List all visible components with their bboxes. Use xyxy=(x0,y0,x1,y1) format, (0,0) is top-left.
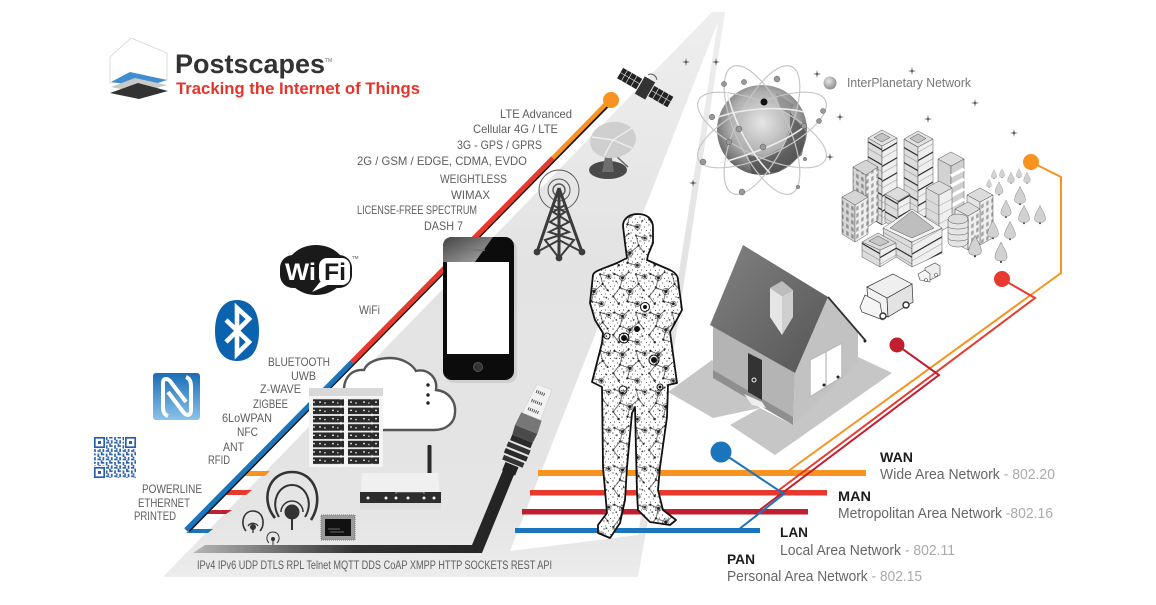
stars xyxy=(682,58,1018,187)
front block xyxy=(862,233,896,267)
cellular and long-range labels: 2G / GSM / EDGE, CDMA, EVDO xyxy=(357,154,527,168)
icon: person with network nodes xyxy=(590,214,682,538)
short-range labels xyxy=(134,355,330,523)
short-range labels: 6LoWPAN xyxy=(222,411,272,425)
icon: globe with orbits xyxy=(688,56,836,204)
icon: smartphone xyxy=(443,237,517,383)
bands: network horizontal lines xyxy=(515,470,866,533)
block G xyxy=(926,181,952,232)
label: WAN: Wide Area Network - 802.20 xyxy=(880,466,1055,483)
icon: NFC xyxy=(153,373,200,420)
short-range labels: ANT xyxy=(223,440,245,454)
logo wordmark: Postscapes xyxy=(175,49,325,79)
short-range labels: ETHERNET xyxy=(138,496,191,510)
short-range labels: Z-WAVE xyxy=(260,382,301,396)
cellular and long-range labels: 3G - GPS / GPRS xyxy=(457,138,542,152)
icon: delivery truck xyxy=(860,274,913,320)
icon: WiFi logo: Wi xyxy=(285,259,316,286)
cellular and long-range labels: WiFi xyxy=(359,303,380,317)
MAN connector and node xyxy=(775,271,1035,493)
icon: satellite dish xyxy=(587,118,639,179)
icon: WiFi logo: TM xyxy=(352,255,359,260)
label: PAN: PAN xyxy=(727,551,755,567)
icon: radio tower xyxy=(534,170,585,261)
logo trademark: TM xyxy=(325,58,332,64)
protocols text: IPv4 IPv6 UDP DTLS RPL Telnet MQTT DDS CoAP XMPP HTTP SOCKETS REST API xyxy=(197,558,552,572)
cellular and long-range labels: DASH 7 xyxy=(424,219,463,233)
cellular and long-range labels: LTE Advanced xyxy=(500,107,572,121)
bottom stubs of the network bands xyxy=(186,471,270,533)
icon: wireless router xyxy=(360,445,441,510)
icon: QR code xyxy=(93,436,137,479)
logo: Postscapes xyxy=(110,38,420,99)
base line to cable xyxy=(193,470,516,553)
tower A xyxy=(868,130,897,225)
block H xyxy=(967,188,993,245)
icon: house xyxy=(668,245,892,455)
logo tagline: Tracking the Internet of Things xyxy=(176,79,420,98)
label: LAN: LAN xyxy=(780,524,808,540)
dark red connector and node xyxy=(757,338,939,512)
icon: large signal antenna xyxy=(267,472,317,530)
short-range labels: RFID xyxy=(208,453,230,467)
cellular and long-range labels: WEIGHTLESS xyxy=(440,172,507,186)
cellular and long-range labels xyxy=(357,107,572,317)
icon: server rack xyxy=(309,388,383,467)
icon: logo stacked layers xyxy=(110,38,168,99)
tower C xyxy=(938,152,964,222)
label: WAN xyxy=(880,449,1055,483)
label: PAN: Personal Area Network - 802.15 xyxy=(727,568,922,585)
short-range labels: UWB xyxy=(291,369,316,383)
short-range labels: NFC xyxy=(237,425,258,439)
cloud dots xyxy=(426,383,430,405)
icon: Bluetooth xyxy=(215,300,259,361)
diagonal wireless spectrum line xyxy=(186,102,610,531)
icon: satellite xyxy=(615,60,678,111)
label: WAN: WAN xyxy=(880,449,913,465)
cylinder building xyxy=(948,214,968,247)
orange end node xyxy=(603,92,619,108)
WAN connector and node xyxy=(787,154,1061,472)
label: LAN xyxy=(780,524,955,559)
InterPlanetary label: InterPlanetary Network xyxy=(847,75,971,90)
short-range labels: BLUETOOTH xyxy=(268,355,330,369)
office D xyxy=(853,160,878,228)
block I xyxy=(955,202,980,250)
label: LAN: Local Area Network - 802.11 xyxy=(780,542,955,559)
icon: small van xyxy=(918,263,940,282)
icon: city skyline xyxy=(842,130,993,267)
cellular and long-range labels: WIMAX xyxy=(451,188,490,202)
label: PAN xyxy=(727,551,922,585)
icon: ethernet cable xyxy=(497,382,555,477)
pyramid building xyxy=(883,209,942,267)
short-range labels: POWERLINE xyxy=(142,482,202,496)
icon: forest trees xyxy=(969,169,1045,263)
icon: cloud xyxy=(344,358,455,430)
icon: small signal antenna xyxy=(243,511,263,533)
panel: grey perspective beam xyxy=(163,12,725,577)
cellular and long-range labels: Cellular 4G / LTE xyxy=(473,122,558,136)
office E xyxy=(842,190,868,242)
icon: WiFi logo: Fi xyxy=(324,259,346,286)
short-range labels: ZIGBEE xyxy=(253,397,288,411)
label: MAN: Metropolitan Area Network -802.16 xyxy=(838,505,1053,522)
block F xyxy=(885,187,910,229)
tower B xyxy=(904,131,933,225)
PAN connector and node xyxy=(710,442,784,530)
label: MAN: MAN xyxy=(838,488,871,504)
icon: WiFi logo xyxy=(280,245,359,295)
icon: tiny signal antenna xyxy=(267,532,279,545)
short-range labels: PRINTED xyxy=(134,509,176,523)
label: MAN xyxy=(838,488,1053,522)
icon: moon xyxy=(824,76,836,90)
cellular and long-range labels: LICENSE-FREE SPECTRUM xyxy=(357,203,477,217)
icon: microchip xyxy=(321,515,355,540)
